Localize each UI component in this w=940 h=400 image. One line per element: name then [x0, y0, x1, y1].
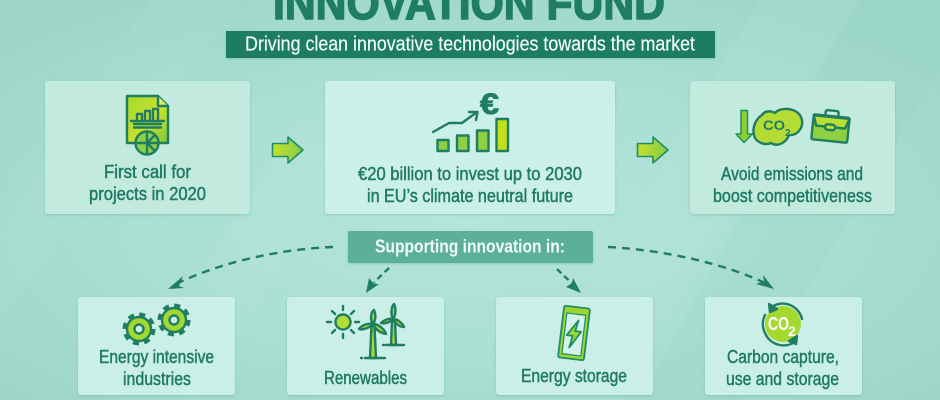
- arrow: to energy storage: [557, 269, 581, 293]
- text: energy intensive industries: industries: [123, 369, 191, 389]
- text: energy intensive industries: [99, 347, 214, 389]
- icon: CO2 cloud: 2: [785, 128, 791, 139]
- text: 20 billion: €20 billion to invest up to 2030: [358, 164, 582, 184]
- text: energy storage: Energy storage: [521, 366, 627, 386]
- icon: growing bars and euro: €: [480, 88, 499, 121]
- text: carbon capture: [726, 347, 839, 389]
- icon: CO2 cycle: 2: [788, 323, 796, 339]
- icon: down arrow: [736, 110, 752, 142]
- text: carbon capture: Carbon capture,: [727, 347, 839, 367]
- icon: document with charts: [127, 96, 168, 154]
- text: renewables: Renewables: [324, 368, 407, 388]
- icon: CO2 cycle: [763, 304, 802, 345]
- panel: avoid emissions: [690, 81, 895, 214]
- text: 20 billion: [358, 164, 582, 206]
- arrow: to energy intensive industries: [168, 247, 333, 289]
- icon: growing bars and euro: [433, 88, 508, 151]
- banner: supporting innovation: Supporting innovation in:: [375, 236, 565, 256]
- icon: CO2 cloud: CO: [763, 117, 785, 133]
- text: first call: First call for: [104, 162, 191, 182]
- arrow: to carbon capture: [608, 247, 774, 289]
- text: energy intensive industries: Energy intensive: [99, 347, 214, 367]
- icon: CO2 cloud: [753, 109, 802, 145]
- text: avoid emissions: boost competitiveness: [713, 186, 872, 206]
- panel: first call: [45, 81, 250, 214]
- text: avoid emissions: Avoid emissions and: [721, 164, 863, 184]
- icon: gears: [126, 306, 188, 342]
- panel: energy intensive industries: [78, 297, 235, 395]
- arrow: first to second: [272, 137, 303, 163]
- text: avoid emissions: [713, 164, 872, 206]
- text: first call: projects in 2020: [89, 184, 206, 204]
- banner: supporting innovation: [348, 231, 593, 263]
- text: first call: [89, 162, 206, 204]
- text: carbon capture: use and storage: [726, 369, 839, 389]
- arrow: to renewables: [366, 268, 389, 293]
- text: 20 billion: in EU’s climate neutral future: [367, 186, 573, 206]
- panel: carbon capture: [705, 297, 862, 395]
- icon: briefcase: [811, 109, 850, 143]
- icon: phone battery: [558, 306, 590, 360]
- icon: CO2 cycle: CO: [768, 314, 789, 334]
- subtitle banner: Driving clean innovative technologies towards the market: [245, 34, 695, 56]
- panel: energy storage: [496, 297, 653, 395]
- icon: sun and wind turbines: [327, 304, 404, 358]
- panel: 20 billion: [325, 81, 615, 214]
- panel: renewables: [287, 297, 444, 395]
- arrow: second to third: [638, 137, 668, 163]
